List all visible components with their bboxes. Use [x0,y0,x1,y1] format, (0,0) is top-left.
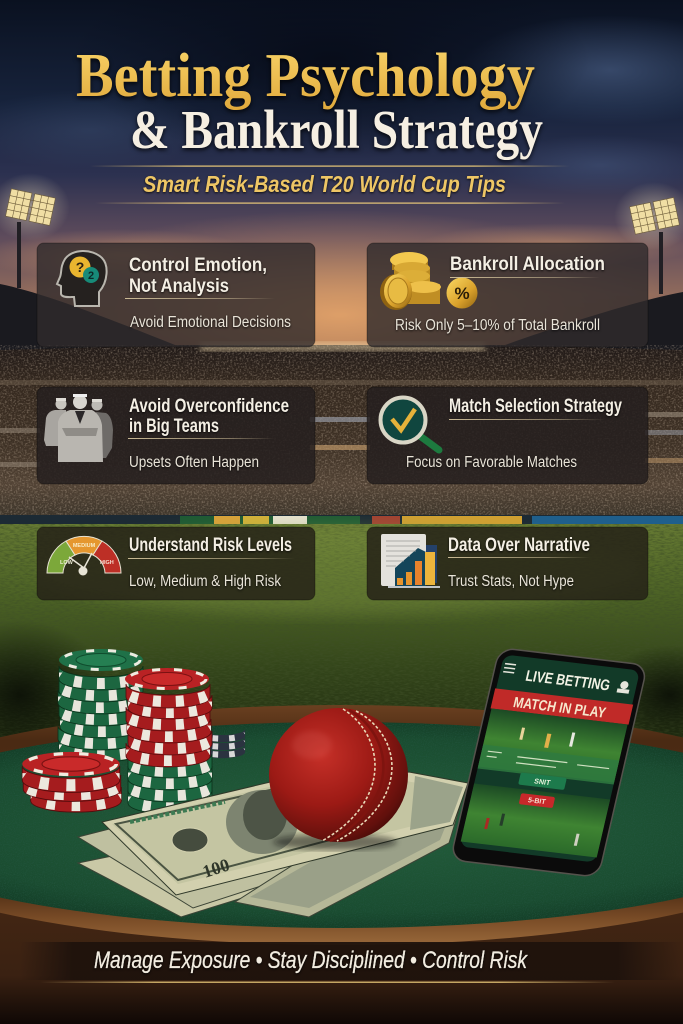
stack of dollar bills [78,772,468,917]
panel: bankroll allocation [367,243,648,347]
wooden table with green felt [0,705,683,1024]
icon: head with question marks [57,251,107,306]
green button: SNIT [533,777,552,787]
title line 1: Betting Psychology [76,42,535,110]
panel: overconfidence [37,387,315,484]
heading: Bankroll Allocation [450,254,605,275]
heading: Match Selection Strategy [449,396,622,417]
green button [518,773,567,790]
description: Avoid Emotional Decisions [130,314,291,331]
description: Upsets Often Happen [129,454,259,471]
panel: control emotion [37,243,315,347]
heading: Understand Risk Levels [129,535,292,556]
panel: match selection [367,387,648,484]
panel: data over narrative [367,527,648,600]
app header [501,663,632,697]
poker chip stacks [20,649,246,814]
bottom banner [20,942,683,983]
description: Focus on Favorable Matches [406,454,577,471]
heading: Control Emotion, [129,255,267,276]
icon: gold coins [380,252,478,310]
bill denomination: 100 [200,854,232,882]
smartphone with live betting app [450,648,647,877]
description: Trust Stats, Not Hype [448,573,574,590]
title line 2: & Bankroll Strategy [130,99,543,160]
heading: Data Over Narrative [448,535,590,556]
icon: gold coins: % [454,284,470,303]
red button [519,793,555,808]
icon: magnifier with check [380,398,439,450]
stadium background [0,0,683,770]
description: Low, Medium & High Risk [129,573,281,590]
panel: risk levels [37,527,315,600]
icon: head with question marks: 2 [88,270,94,282]
icon: risk gauge: HIGH [100,560,114,566]
heading line 2: in Big Teams [129,416,219,437]
live match view [461,708,628,858]
icon: head with question marks: ? [76,259,84,275]
floodlight left [0,173,70,288]
red button: 5-BIT [527,796,547,806]
icon: document with bar chart [381,534,440,588]
red banner [491,688,633,725]
cricket ball [269,708,408,850]
description: Risk Only 5–10% of Total Bankroll [395,317,600,334]
icon: risk gauge [47,536,121,576]
floodlight right [614,182,683,294]
icon: three team figures [44,394,113,462]
heading line 2: Not Analysis [129,276,229,297]
red banner: MATCH IN PLAY [512,695,607,722]
tagline: Manage Exposure • Stay Disciplined • Control Risk [94,947,529,974]
icon: risk gauge: MEDIUM [73,543,96,549]
subtitle: Smart Risk-Based T20 World Cup Tips [143,171,506,197]
icon: risk gauge: LOW [60,560,74,566]
title block [76,42,570,204]
heading: Avoid Overconfidence [129,396,289,417]
app header: LIVE BETTING [524,668,612,694]
